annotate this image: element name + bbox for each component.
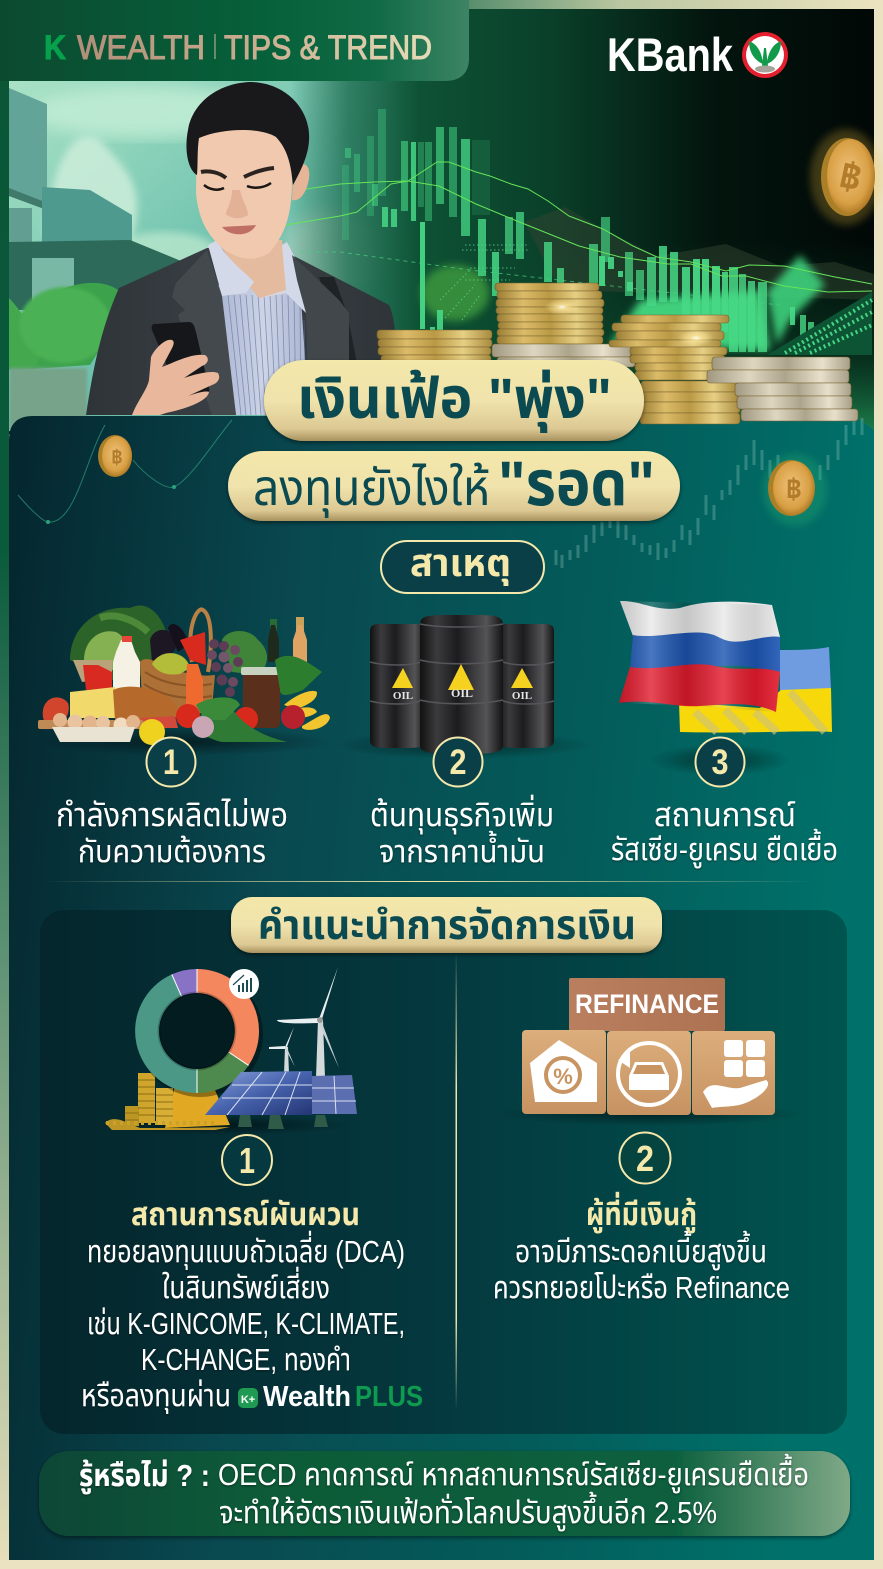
advice text 1: หรือลงทุนผ่าน [81,1378,231,1414]
advice 1: diversify [81,967,423,1414]
panel: money management advice [40,897,847,1434]
icon: bitcoin coin, top right: ฿ [835,155,866,201]
badge 1: 1 [239,1140,255,1181]
faded candlestick chart in panel [556,418,862,568]
caption: สถานการณ์ [654,796,796,833]
icon: small coin right: ฿ [786,474,802,505]
icon: refinance wooden blocks [522,978,775,1115]
callout: did you know: จะทำให้อัตราเงินเฟ้อทั่วโลกปรับสูงขึ้นอีก 2.5% [219,1491,717,1531]
logo: K WEALTH TIPS & TREND tab [0,0,469,81]
lapels [172,250,236,415]
logo: K+ Wealth PLUS: K+ [241,1394,255,1406]
caption [370,794,554,869]
badge 2: 2 [636,1138,654,1179]
badge 3 [696,738,744,786]
icon: oil barrels: OIL [393,690,413,702]
logo: K WEALTH TIPS & TREND tab: TIPS & TREND [224,29,432,67]
coin stacks [377,283,858,424]
advice text 1: เช่น K-GINCOME, K-CLIMATE, [87,1306,405,1341]
heading: advice: คำแนะนำการจัดการเงิน [258,902,636,948]
advice 2: refinance [493,978,805,1305]
icon: small coin right [763,454,827,526]
icon: small coin left [98,435,132,477]
suit jacket [86,248,398,415]
icon: house percent [530,1040,597,1102]
person with smartphone [86,82,398,415]
advice text 2 [493,1191,790,1305]
title pill 2 [228,449,680,521]
decorative growth line with coin [18,420,232,524]
sparkles [544,299,714,346]
stack: right gold [609,315,740,424]
advice text 1: K-CHANGE, ทองคำ [141,1342,351,1377]
shirt [218,285,309,415]
caption [611,796,838,868]
badge 2 [620,1132,670,1184]
advice text 2: อาจมีภาระดอกเบี้ยสูงขึ้น [515,1230,767,1270]
icon: car in cycle [618,1043,680,1105]
panel: cause 3 conflict [611,601,838,868]
logo: KBank: KBank [607,28,734,81]
icon: oil barrels: OIL [512,690,532,702]
main teal panel [9,416,874,1560]
advice text 2: ควรทยอยโปะหรือ Refinance [493,1270,790,1305]
advice text 1 [81,1196,423,1414]
phone [152,322,209,396]
stack: silver [707,357,858,421]
bag strap [319,277,356,415]
icon: refinance wooden blocks: REFINANCE [575,989,719,1019]
icon: house percent: % [553,1064,573,1089]
callout: did you know [39,1451,850,1536]
diagonal chart band [767,292,872,355]
chart candlesticks [342,109,851,352]
title pill 1 [264,360,644,441]
logo: K+ Wealth PLUS: Wealth [263,1381,351,1413]
panel: cause 2 oil [332,615,592,869]
icon: oil barrels: OIL [451,686,473,700]
callout: did you know: รู้หรือไม่ ? : [79,1458,210,1494]
icon: bitcoin coin, top right [810,129,882,225]
badge 2 [434,738,482,786]
hand [132,340,219,415]
logo: K WEALTH TIPS & TREND tab: WEALTH [77,29,205,67]
badge 1 [222,1135,272,1185]
icon: chart badge [229,969,259,999]
caption: ต้นทุนธุรกิจเพิ่ม [370,794,554,835]
icon: wind turbines [269,967,339,1078]
heading: causes [381,541,544,593]
icon: small coin left: ฿ [111,447,123,469]
caption: กำลังการผลิตไม่พอ [56,796,288,833]
hero background: city and market chart [9,9,874,434]
caption: กับความต้องการ [78,834,266,869]
icon: Russia flag [619,601,780,712]
stack: tall gold and silver base [492,283,635,367]
advice text 1: ในสินทรัพย์เสี่ยง [162,1266,330,1305]
advice text 2: ผู้ที่มีเงินกู้ [586,1191,697,1233]
badge 1: 1 [163,743,179,782]
hair [186,82,309,185]
logo: K WEALTH TIPS & TREND tab: K [44,29,66,67]
neck [216,240,288,298]
stack: left gold [377,330,492,363]
badge 3: 3 [712,743,728,782]
icon: oil barrels [370,615,554,754]
advice text 1: สถานการณ์ผันผวน [131,1196,360,1232]
logo: K+ Wealth PLUS [238,1381,423,1413]
title pill 2: "รอด" [498,449,655,519]
data dots [440,245,530,320]
icon: food basket [38,606,330,745]
title pill 1: เงินเฟ้อ "พุ่ง" [297,367,612,433]
heading: causes: สาเหตุ [410,543,511,586]
icon: Ukraine flag [679,647,832,733]
icon: hand with documents [703,1040,768,1108]
badge 2: 2 [450,743,466,782]
icon: KBank leaf emblem [742,32,788,78]
icon: solar panels [205,1071,357,1129]
chart trend lines [285,162,872,305]
callout: did you know: OECD คาดการณ์ หากสถานการณ์รัสเซีย-ยูเครนยืดเยื้อ [218,1453,809,1493]
bright green bands [610,255,825,350]
advice text 1: ทยอยลงทุนแบบถัวเฉลี่ย (DCA) [87,1230,405,1270]
right ear [292,164,309,200]
caption: รัสเซีย-ยูเครน ยืดเยื้อ [611,828,838,868]
eyes and brows [201,168,274,178]
donut chart [135,969,259,1093]
icon: gold coins and bars [105,1073,230,1130]
caption [56,796,288,869]
hills [524,207,874,300]
face [196,130,292,259]
title pill 2: ลงทุนยังไงให้ [253,460,490,518]
city sky [9,81,429,431]
collar [208,240,254,296]
caption: จากราคาน้ำมัน [379,830,545,869]
badge 1 [146,738,196,786]
panel: cause 1 production [35,606,335,869]
logo: K+ Wealth PLUS: PLUS [355,1381,423,1413]
